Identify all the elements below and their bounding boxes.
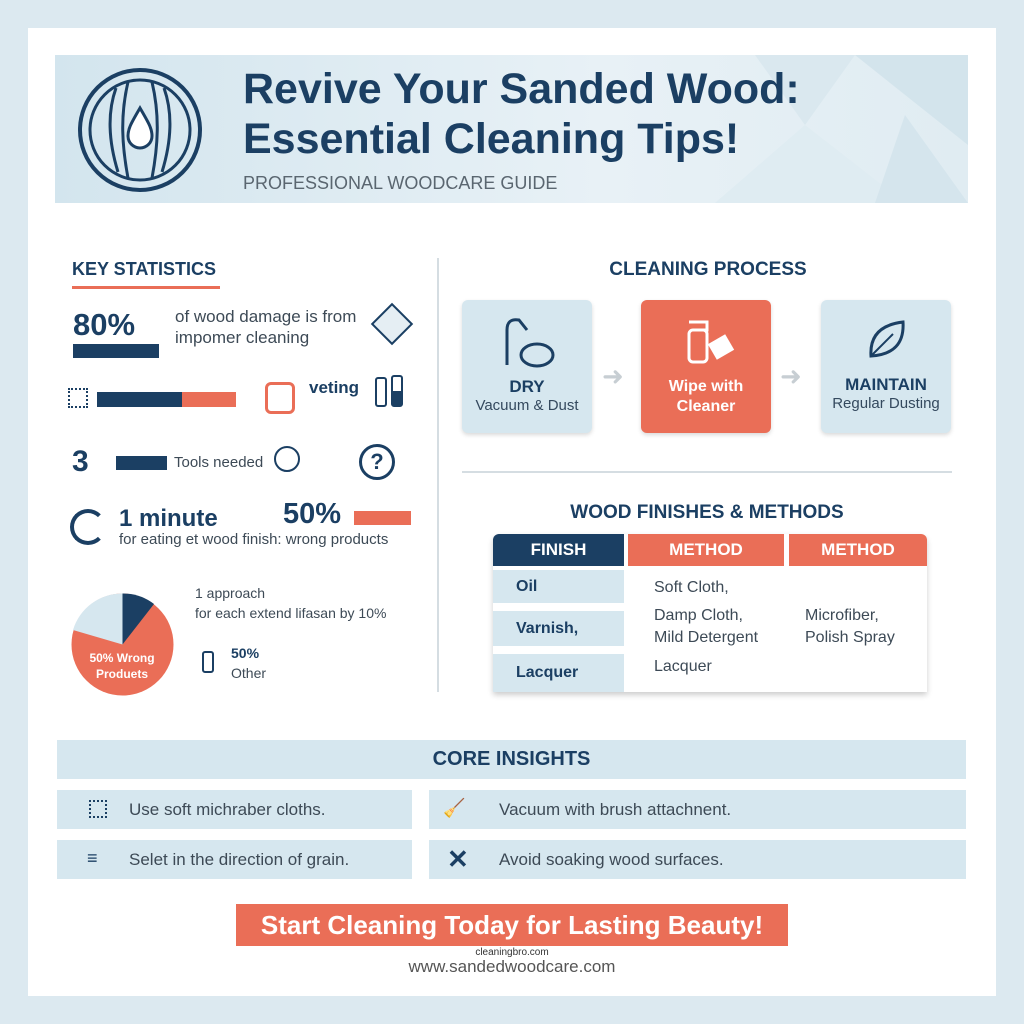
step: maintain [821,300,951,433]
panel: key statistics: veting [309,378,359,397]
step: dry: DRY [509,377,545,396]
stat bar [68,388,88,408]
step: maintain: Regular Dusting [832,395,940,412]
table: finishes: METHOD [669,540,743,559]
stat 1 minute [70,509,106,545]
insight 2: 🧹 [443,798,465,818]
table: finishes: Soft Cloth, [654,579,729,596]
panel: key statistics: Tools needed [174,454,263,471]
heading [57,740,966,779]
insight 3: Selet in the direction of grain. [129,850,349,869]
title: Revive Your Sanded Wood: [243,65,800,113]
table: finishes: Oil [516,578,537,595]
table: finishes: Lacquer [654,658,712,675]
arrow: ➜ [602,361,624,391]
panel: key statistics: 50% [283,498,341,530]
heading: CORE INSIGHTS [433,748,590,770]
insight 2 [429,790,966,829]
arrow: ➜ [780,361,802,391]
heading: CLEANING PROCESS [609,259,807,280]
step: maintain: MAINTAIN [845,375,927,394]
divider [462,471,952,473]
table: finishes: FINISH [531,540,586,559]
table: finishes: Microfiber, [805,607,879,624]
call to action button [236,904,788,946]
insight 3 [57,840,412,879]
title: Essential Cleaning Tips! [243,115,739,163]
pie chart [72,594,174,696]
subtitle: PROFESSIONAL WOODCARE GUIDE [243,173,557,193]
step: wipe [641,300,771,433]
step: dry: Vacuum & Dust [475,397,579,414]
table: finishes [493,534,927,692]
icon: wood circle with drop [78,68,202,192]
title [243,65,800,163]
table: finishes: Lacquer [516,664,578,681]
footer: cleaningbro.com [475,947,549,958]
heading: wood finishes: WOOD FINISHES & METHODS [570,502,844,523]
table: finishes: Polish Spray [805,629,895,646]
panel: key statistics: of wood damage is from [175,307,356,326]
stat 80%: 80% [73,307,135,342]
panel: key statistics: impomer cleaning [175,328,309,347]
panel: key statistics: ? [370,449,384,474]
insight 1 [57,790,412,829]
insight 1: Use soft michraber cloths. [129,800,326,819]
step: wipe: Wipe with [669,378,743,395]
panel: key statistics: 50% [231,645,259,661]
header band [55,55,968,203]
panel: key statistics [68,259,414,696]
step: wipe: Cleaner [677,398,735,415]
stat 3 tools: 3 [72,445,89,478]
table: finishes: METHOD [821,540,895,559]
table: finishes: Mild Detergent [654,629,758,646]
table: finishes: Damp Cloth, [654,607,743,624]
divider [437,258,439,692]
panel: core insights [57,740,966,879]
panel: key statistics: for each extend lifasan by 10% [195,605,386,621]
insight 4: Avoid soaking wood surfaces. [499,850,724,869]
panel: key statistics: Other [231,665,266,681]
panel: key statistics: for eating et wood finish: wrong products [119,531,388,548]
panel: cleaning process [460,259,952,436]
panel: key statistics: 1 approach [195,585,265,601]
insight 3: ≡ [87,848,98,868]
call to action button: Start Cleaning Today for Lasting Beauty! [261,910,763,940]
insight 4 [429,840,966,879]
insight 4: ✕ [447,844,469,874]
pie chart: Produets [96,667,148,681]
text: www.sandedwoodcare.com [409,957,615,976]
heading: KEY STATISTICS [72,259,216,279]
pie chart: 50% Wrong [89,651,155,665]
table: finishes: Varnish, [516,620,578,637]
panel: key statistics: 1 minute [119,505,218,532]
insight 2: Vacuum with brush attachnent. [499,800,731,819]
step: dry [462,300,592,433]
